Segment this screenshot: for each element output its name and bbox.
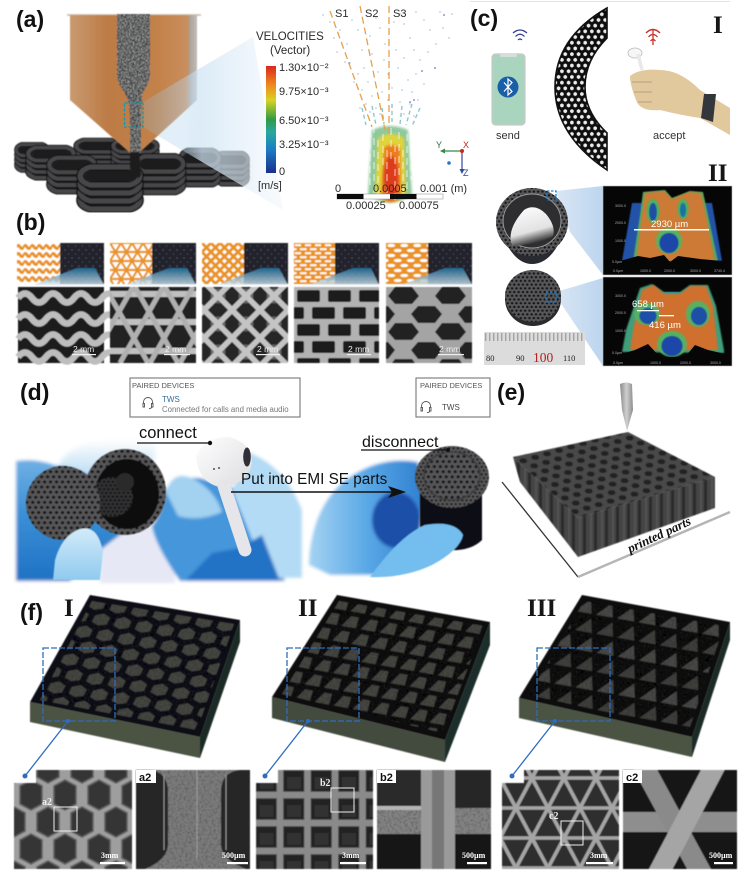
- panel label f: (f): [20, 599, 43, 625]
- printed parts label: printed parts: [624, 513, 693, 556]
- SEM b1 square grid: [256, 770, 373, 869]
- scale bar: 0.00025: [346, 200, 386, 212]
- surface scan top: 1000.0: [615, 239, 626, 243]
- velocity legend: [m/s]: [258, 180, 282, 192]
- shielding cup with earbud inside: [496, 188, 568, 264]
- a1 annotations: [42, 797, 125, 864]
- c1 annotations: 3mm: [590, 851, 608, 860]
- scale bars 2 mm: 2 mm: [348, 344, 369, 354]
- panel label d: (d): [20, 379, 49, 405]
- scale bars 2 mm: [72, 344, 464, 355]
- scale bars 2 mm: 2 mm: [257, 344, 278, 354]
- b2 annotations: [377, 770, 487, 864]
- surface scan bottom: 2000.0: [680, 361, 691, 365]
- c2 annotations: c2: [626, 772, 638, 784]
- earbud: [196, 437, 252, 550]
- b2 annotations: b2: [380, 772, 393, 784]
- surface scan top: 0.0µm: [612, 260, 622, 264]
- right photo: glove holding shield cylinder: [309, 425, 494, 583]
- b2 annotations: 500µm: [462, 851, 486, 860]
- c1 annotations: [549, 811, 613, 864]
- paired devices box connected: Connected for calls and media audio: [162, 405, 289, 414]
- section lines S1 S2 S3: S2: [365, 8, 378, 20]
- SEM a1 hexagonal: [14, 770, 132, 869]
- surface scan bottom: 3000.0: [615, 294, 626, 298]
- lattice column 1: wave: [17, 243, 116, 363]
- printing bed: [502, 482, 730, 577]
- dashed selection boxes and leader lines: [22, 648, 610, 778]
- panel label b: (b): [16, 209, 45, 235]
- paired devices box connected: [130, 378, 300, 417]
- SEM b2 crossing: [377, 770, 491, 869]
- b1 annotations: [320, 778, 366, 864]
- surface scan bottom: 2000.0: [615, 311, 626, 315]
- paired devices box disconnected: [416, 378, 490, 417]
- callout wedge to flow field: [143, 37, 283, 210]
- section lines S1 S2 S3: [330, 6, 406, 135]
- axes triad: [436, 140, 469, 178]
- b1 annotations: b2: [320, 778, 331, 789]
- axes triad: Z: [463, 168, 469, 178]
- surface scan top: 2930 µm: [651, 219, 688, 230]
- surface scan top: 3740.4: [714, 269, 725, 273]
- panel e: printed honeycomb part: [497, 379, 730, 577]
- roman numeral III: III: [527, 595, 556, 622]
- nozzle: [620, 382, 633, 431]
- surface scan top: 0.0µm: [613, 269, 623, 273]
- connect callout: connect: [139, 424, 197, 442]
- honeycomb disc: [505, 270, 561, 326]
- ruler: 110: [563, 353, 575, 363]
- accept label: accept: [653, 130, 685, 142]
- ruler: 100: [533, 350, 554, 365]
- a1 annotations: 3mm: [101, 851, 119, 860]
- surface scan bottom: 1000.0: [615, 329, 626, 333]
- paired devices box disconnected: PAIRED DEVICES: [420, 381, 482, 390]
- ruler: 90: [516, 353, 524, 363]
- lattice column 4: meander: [294, 243, 379, 363]
- callout wedge top scan: [556, 186, 603, 275]
- wifi icon red: [646, 30, 660, 45]
- surface scan top: 3000.0: [690, 269, 701, 273]
- surface scan top: [603, 186, 732, 275]
- surface scan bottom: [603, 277, 732, 366]
- send label: send: [496, 130, 520, 142]
- surface scan bottom: 0.0µm: [612, 351, 622, 355]
- a2 annotations: [136, 770, 248, 864]
- c2 annotations: [623, 770, 733, 864]
- arrow: put into EMI SE parts: [231, 471, 406, 498]
- wifi icon blue: [513, 30, 527, 40]
- panel a: nozzle, velocity legend and flow field: [16, 6, 469, 212]
- SEM a2 junction: [136, 770, 250, 869]
- surface scan top: 2000.0: [664, 269, 675, 273]
- panel label e: (e): [497, 379, 525, 405]
- velocity legend: 9.75×10⁻³: [279, 86, 329, 98]
- section lines S1 S2 S3: S3: [393, 8, 406, 20]
- surface scan top: 2000.0: [615, 221, 626, 225]
- scale bar: 0: [335, 183, 341, 195]
- nozzle body with printing ink channel: [67, 14, 201, 178]
- flow vector field: [323, 12, 452, 202]
- lattice column 2: triangle: [90, 243, 223, 363]
- lattice column 5: hexagon: [386, 243, 472, 363]
- surface scan bottom: 3000.0: [710, 361, 721, 365]
- scale bar: 0.001 (m): [420, 183, 467, 195]
- scale bar: [335, 183, 467, 212]
- printed block: [513, 432, 715, 557]
- scale bars 2 mm: 2 mm: [439, 344, 460, 354]
- axes triad: X: [463, 140, 469, 150]
- velocity legend: 1.30×10⁻²: [279, 62, 329, 74]
- callout wedge bottom scan: [556, 278, 603, 366]
- paired devices box disconnected: TWS: [442, 403, 460, 412]
- velocity legend: 6.50×10⁻³: [279, 115, 329, 127]
- b1 annotations: 3mm: [342, 851, 360, 860]
- a1 annotations: a2: [42, 797, 52, 808]
- surface scan top: 1000.0: [640, 269, 651, 273]
- section lines S1 S2 S3: S1: [335, 8, 348, 20]
- dashed zoom box on nozzle: [124, 103, 143, 127]
- c1 annotations: c2: [549, 811, 558, 822]
- disconnect callout: disconnect: [362, 434, 439, 451]
- c2 annotations: 500µm: [709, 851, 733, 860]
- scale bar: 0.00075: [399, 200, 439, 212]
- panel f: printed blocks and SEM details: [14, 595, 737, 874]
- roman numeral I: I: [713, 12, 723, 39]
- hand holding earbud: [628, 48, 730, 135]
- roman numeral II: II: [708, 160, 727, 187]
- panel label c: (c): [470, 5, 498, 31]
- scale bar: 0.0005: [373, 183, 407, 195]
- axes triad: Y: [436, 140, 442, 150]
- ruler: 80: [486, 353, 494, 363]
- surface scan top: 3000.0: [615, 204, 626, 208]
- panel c: wireless shielding demo and surface scans: [470, 5, 732, 366]
- SEM c2 crossing: [623, 760, 737, 874]
- velocity legend: (Vector): [270, 45, 310, 57]
- velocity legend: 0: [279, 166, 285, 178]
- block II: [272, 595, 490, 762]
- a2 annotations: a2: [139, 772, 151, 784]
- panel d: earbud connect vs disconnect demo: [14, 378, 494, 583]
- block I: [30, 595, 240, 758]
- velocity legend: [256, 31, 329, 192]
- surface scan bottom: 0.0µm: [613, 361, 623, 365]
- roman numeral I: I: [64, 595, 74, 622]
- velocity legend: 3.25×10⁻³: [279, 139, 329, 151]
- SEM c1 triangular grid: [502, 770, 619, 869]
- panel b: five lattice patterns: [16, 209, 472, 363]
- surface scan bottom: 1000.0: [650, 361, 661, 365]
- surface scan bottom: 416 µm: [649, 320, 681, 331]
- connect callout: [137, 424, 212, 445]
- ruler: [484, 332, 585, 365]
- phone with bluetooth: [492, 54, 525, 125]
- panel label a: (a): [16, 6, 44, 32]
- left photo: gloves, open shield and earbud: [14, 425, 304, 583]
- paired devices box connected: PAIRED DEVICES: [132, 381, 194, 390]
- block III: [519, 595, 730, 757]
- scale bars 2 mm: 2 mm: [165, 344, 186, 354]
- paired devices box connected: TWS: [162, 395, 180, 404]
- lattice column 3: diamond grid: [202, 243, 288, 363]
- velocity legend: VELOCITIES: [256, 31, 324, 43]
- printed hexagonal stacks under nozzle: [16, 140, 248, 209]
- surface scan bottom: 658 µm: [632, 299, 664, 310]
- a2 annotations: 500µm: [222, 851, 246, 860]
- scale bars 2 mm: 2 mm: [73, 344, 94, 354]
- curved honeycomb shield: [555, 8, 607, 170]
- roman numeral II: II: [298, 595, 317, 622]
- arrow: put into EMI SE parts: Put into EMI SE parts: [241, 471, 388, 488]
